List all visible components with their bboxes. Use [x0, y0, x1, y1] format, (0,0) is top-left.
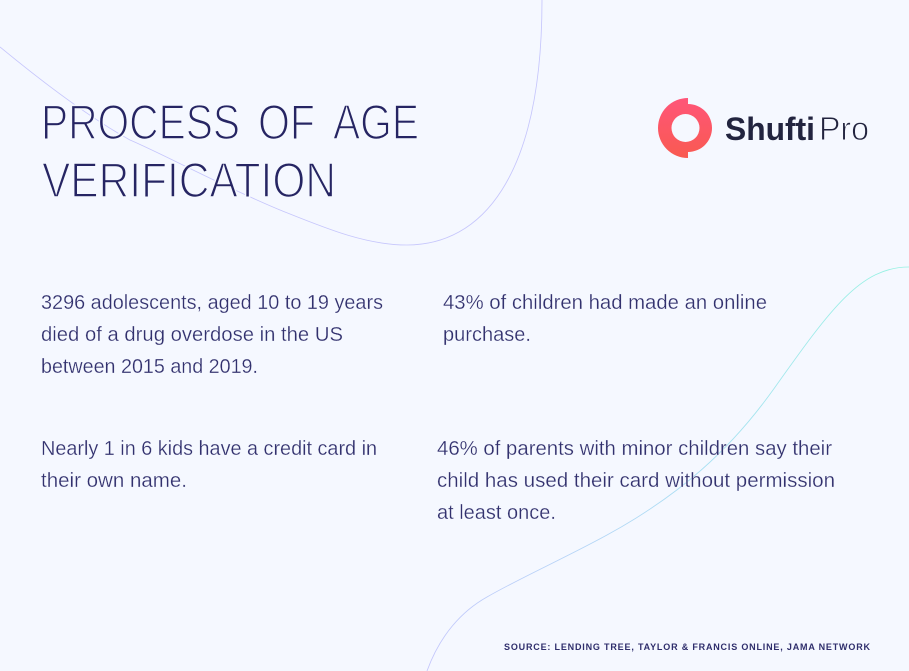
title: OF — [258, 96, 315, 150]
text block: parents card statistic — [437, 437, 835, 524]
text block: adolescents overdose statistic: died of a drug overdose in the US — [41, 323, 343, 346]
title: PROCESS — [41, 96, 240, 150]
text block: online purchase statistic — [443, 291, 767, 346]
source note: SOURCE: LENDING TREE, TAYLOR & FRANCIS ONLINE, JAMA NETWORK — [504, 642, 870, 652]
text block: credit card statistic — [41, 437, 377, 492]
text block: adolescents overdose statistic: between 2015 and 2019. — [41, 355, 258, 378]
logo: Shufti Pro — [658, 98, 869, 158]
title — [41, 96, 419, 208]
text block: adolescents overdose statistic — [41, 291, 383, 378]
logo wordmark — [725, 110, 869, 147]
decorative curve: lavender — [0, 0, 542, 245]
text block: online purchase statistic: 43% of children had made an online — [443, 291, 767, 314]
icon: logo ring — [658, 98, 712, 158]
text block: parents card statistic: 46% of parents with minor children say their — [437, 437, 832, 460]
text block: credit card statistic: their own name. — [41, 469, 187, 492]
logo wordmark: Shufti — [725, 111, 815, 147]
text block: adolescents overdose statistic: 3296 adolescents, aged 10 to 19 years — [41, 291, 383, 314]
text block: parents card statistic: child has used their card without permission — [437, 469, 835, 492]
text block: online purchase statistic: purchase. — [443, 323, 531, 346]
text block: parents card statistic: at least once. — [437, 501, 556, 524]
title: VERIFICATION — [42, 154, 336, 208]
decorative curve: teal to lavender — [427, 267, 909, 671]
title: AGE — [333, 96, 419, 150]
text block: credit card statistic: Nearly 1 in 6 kids have a credit card in — [41, 437, 377, 460]
logo wordmark: Pro — [819, 110, 869, 147]
